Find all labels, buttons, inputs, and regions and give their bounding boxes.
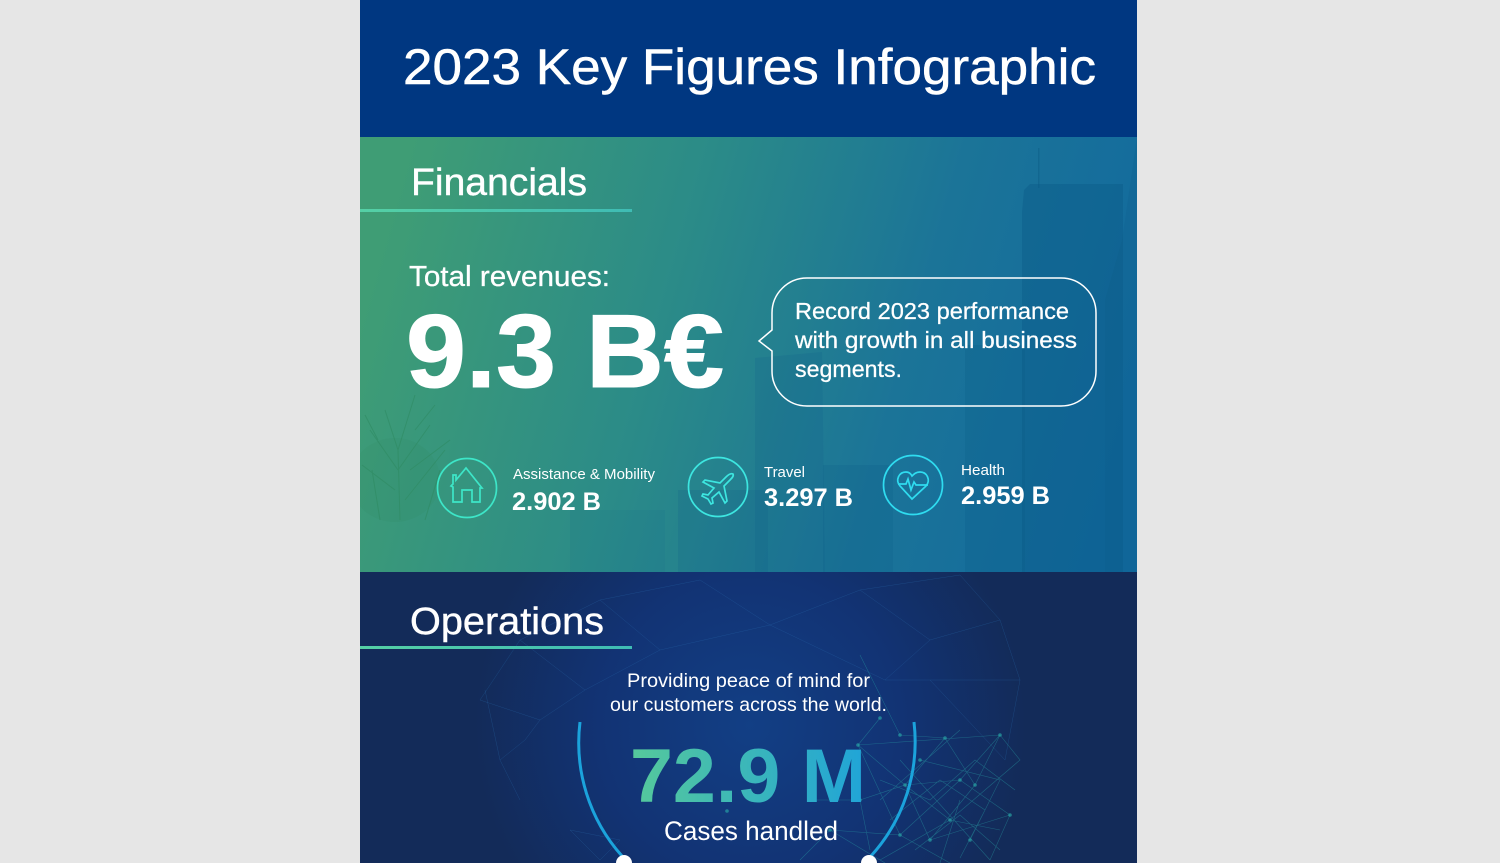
- total revenues figure: 9.3 B€: [406, 294, 724, 410]
- stat: travel: [688, 458, 853, 516]
- stat: health: Health: [961, 463, 1005, 479]
- cases label: Cases handled: [664, 816, 838, 846]
- stat: assistance and mobility: 2.902 B: [512, 488, 601, 516]
- section heading: operations: Operations: [410, 601, 604, 643]
- total revenues label: Total revenues:: [409, 261, 610, 293]
- network globe background: [480, 575, 1020, 863]
- callout: [759, 278, 1096, 406]
- stat: travel: Travel: [764, 465, 805, 481]
- icon: airplane: [688, 458, 748, 516]
- stat: health: 2.959 B: [961, 482, 1050, 510]
- callout: Record 2023 performance: [795, 298, 1069, 324]
- panel: financials: [350, 137, 1137, 572]
- icon: house: [438, 458, 496, 518]
- intro text: Providing peace of mind for: [627, 670, 871, 692]
- cases figure: 72.9 M: [630, 734, 866, 819]
- stat: assistance and mobility: Assistance & Mobility: [513, 467, 656, 483]
- section heading: financials: Financials: [411, 162, 587, 204]
- skyline background: [570, 137, 1137, 572]
- callout: segments.: [795, 356, 902, 382]
- stat: assistance and mobility: [438, 458, 656, 518]
- intro text: our customers across the world.: [610, 694, 887, 716]
- arc frame: [579, 722, 915, 863]
- trees background: [362, 395, 450, 520]
- stat: travel: 3.297 B: [764, 484, 853, 512]
- icon: heart: [884, 456, 942, 514]
- section heading: operations: [360, 606, 632, 649]
- header banner: [360, 0, 1137, 137]
- title: 2023 Key Figures Infographic: [403, 39, 1096, 95]
- panel: operations: [360, 572, 1137, 863]
- callout: with growth in all business: [794, 327, 1077, 353]
- stat: health: [884, 456, 1050, 514]
- section heading: financials: [360, 162, 632, 212]
- intro text: [610, 673, 886, 711]
